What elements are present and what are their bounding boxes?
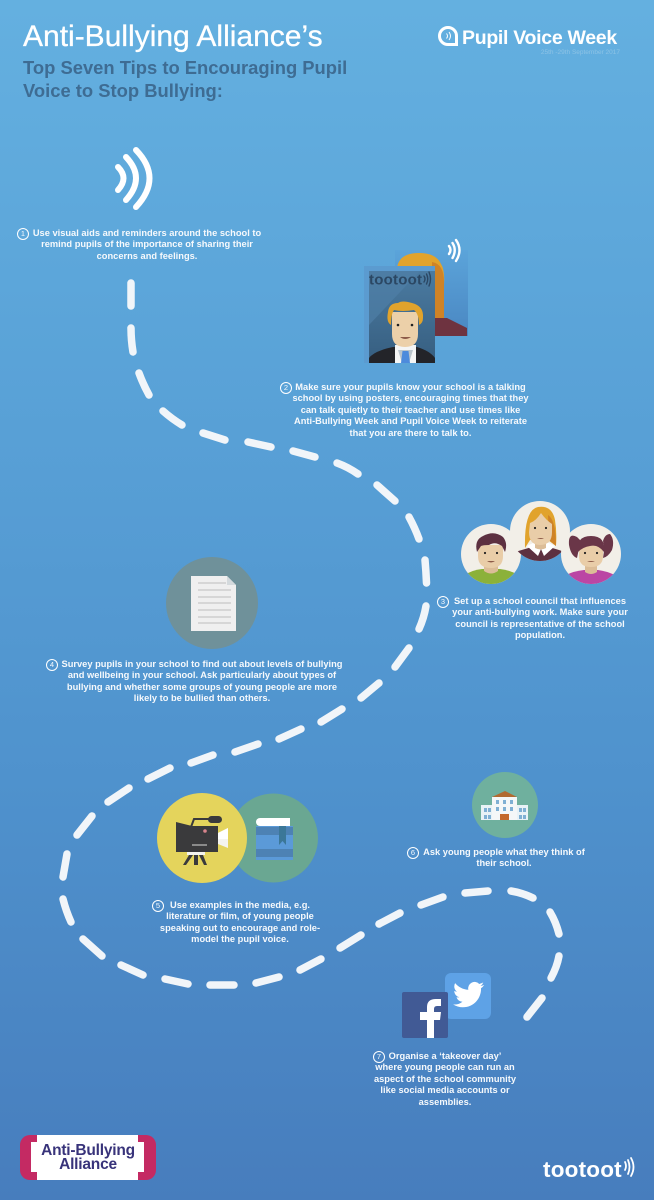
tip 4 text [46,659,342,703]
subtitle [23,57,347,101]
tip 4 text: Survey pupils in your school to find out about levels of bullying [62,659,342,669]
tip 6 text: 6 [411,848,415,857]
tip 4 text: bullying and whether some groups of young people are more [67,682,337,692]
tip 7 text: where young people can run an [375,1062,515,1072]
tip 7 text [373,1051,516,1107]
tip 7 text: 7 [377,1052,381,1061]
tip 2 text: that you are there to talk to. [350,428,471,438]
icon: school building [472,772,538,838]
tip 7 text: aspect of the school community [374,1074,516,1084]
Pupil Voice Week logo [438,26,620,56]
icon: tootoot waves [624,1157,634,1177]
tip 5 text: Use examples in the media, e.g. [170,900,310,910]
tip 1 text: Use visual aids and reminders around the school to [33,228,261,238]
icon: tootoot posters: tootoot [369,272,422,288]
tip 6 text: their school. [476,858,532,868]
tip 5 text: literature or film, of young people [166,911,314,921]
Pupil Voice Week logo: 25th -29th September 2017 [541,49,620,56]
Anti-Bullying Alliance logo [20,1135,156,1180]
tip 2 text: Make sure your pupils know your school is a talking [295,382,526,392]
tip 2 text: can talk quietly to their teacher and use times like [301,405,520,415]
tip 7 text: like social media accounts or [380,1085,510,1095]
tip 5 text: model the pupil voice. [191,934,289,944]
tip 4 text: and wellbeing in your school. Ask particularly about types of [68,670,336,680]
tip 2 text [280,382,529,438]
tip 3 text: council is representative of the school [455,619,625,629]
Anti-Bullying Alliance logo: Alliance [59,1156,117,1173]
tootoot logo: tootoot [543,1157,622,1182]
subtitle: Top Seven Tips to Encouraging Pupil [23,57,347,78]
tip 6 text: Ask young people what they think of [423,847,585,857]
tip 3 text: your anti-bullying work. Make sure your [452,607,628,617]
tip 3 text: Set up a school council that influences [454,596,626,606]
icon: film camera and book [157,793,318,883]
tip 4 text: likely to be bullied than others. [134,693,270,703]
icon: school council faces [461,501,621,584]
icon: document [166,557,258,649]
title: Anti-Bullying Alliance’s [23,20,323,53]
icon: sound waves [115,147,152,210]
tip 1 text: remind pupils of the importance of sharing their [41,239,253,249]
tip 7 text: Organise a ‘takeover day’ [389,1051,501,1061]
tip 5 text: speaking out to encourage and role- [160,923,320,933]
tip 3 text: 3 [441,597,445,606]
tip 2 text: 2 [284,383,288,392]
tip 2 text: school by using posters, encouraging times that they [292,393,529,403]
icon: tootoot posters [364,238,468,363]
tip 1 text [17,228,261,261]
tip 3 text [437,596,628,640]
Pupil Voice Week logo: Pupil Voice Week [462,27,617,49]
dashed path [59,279,563,1021]
subtitle: Voice to Stop Bullying: [23,80,223,101]
tip 4 text: 4 [50,660,54,669]
tip 2 text: Anti-Bullying Week and Pupil Voice Week to reiterate [294,416,527,426]
tip 1 text: concerns and feelings. [97,251,197,261]
tip 1 text: 1 [21,229,25,238]
tip 5 text [152,900,320,944]
icon: twitter and facebook [402,973,491,1038]
tip 7 text: assemblies. [419,1097,471,1107]
Anti-Bullying Alliance logo: Anti-Bullying [41,1142,135,1159]
tip 3 text: population. [515,630,565,640]
tip 5 text: 5 [156,901,160,910]
tip 6 text [407,847,585,868]
